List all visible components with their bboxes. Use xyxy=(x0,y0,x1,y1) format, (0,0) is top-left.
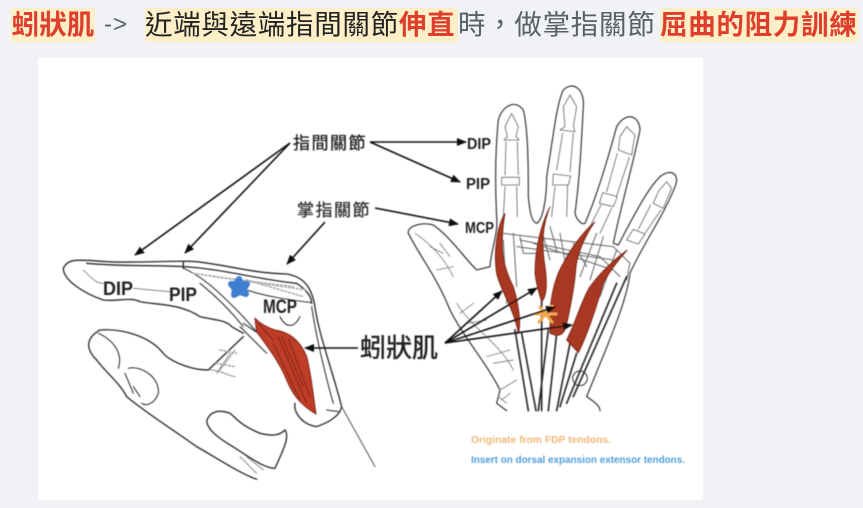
arrows: metacarpophalangeal joint labels xyxy=(287,208,458,264)
panel: illustration background xyxy=(38,58,703,500)
title xyxy=(11,8,858,42)
muscle 2 xyxy=(535,207,550,302)
muscle 4 xyxy=(567,250,627,353)
side view finger and thumb drawing xyxy=(63,260,375,479)
legend: origin: Originate from FDP tendons. xyxy=(471,435,611,446)
finger bones xyxy=(502,95,672,244)
title: 蚓狀肌 xyxy=(12,9,94,40)
muscle 1 xyxy=(495,213,520,333)
icon: blue star insertion point xyxy=(231,279,247,295)
label: DIP palm view: DIP xyxy=(467,136,491,153)
title: 時，做掌指關節 xyxy=(458,9,655,40)
label: interphalangeal joints: 指間關節 xyxy=(293,134,367,153)
label: MCP side view: MCP xyxy=(263,297,297,318)
palm view hand drawing xyxy=(408,86,677,411)
label: metacarpophalangeal joints: 掌指關節 xyxy=(297,201,371,220)
label: PIP palm view: PIP xyxy=(466,176,490,193)
icon: orange star origin point xyxy=(536,306,556,322)
title: 近端與遠端指間關節伸直 xyxy=(145,9,455,40)
label: lumbricals: 蚓狀肌 xyxy=(360,333,438,363)
arrows: interphalangeal joint labels xyxy=(135,142,466,255)
title: 屈曲的阻力訓練 xyxy=(660,9,857,40)
legend: insertion: Insert on dorsal expansion extensor tendons. xyxy=(471,455,685,466)
label: PIP side view: PIP xyxy=(169,285,197,306)
muscle 3 xyxy=(550,222,595,335)
arrows: lumbrical labels xyxy=(305,288,572,348)
title: -> xyxy=(104,11,128,38)
label: MCP palm view: MCP xyxy=(465,220,494,237)
label: DIP side view: DIP xyxy=(103,279,133,300)
palm view lumbrical muscles xyxy=(495,207,627,353)
side view lumbrical muscle xyxy=(255,318,316,414)
